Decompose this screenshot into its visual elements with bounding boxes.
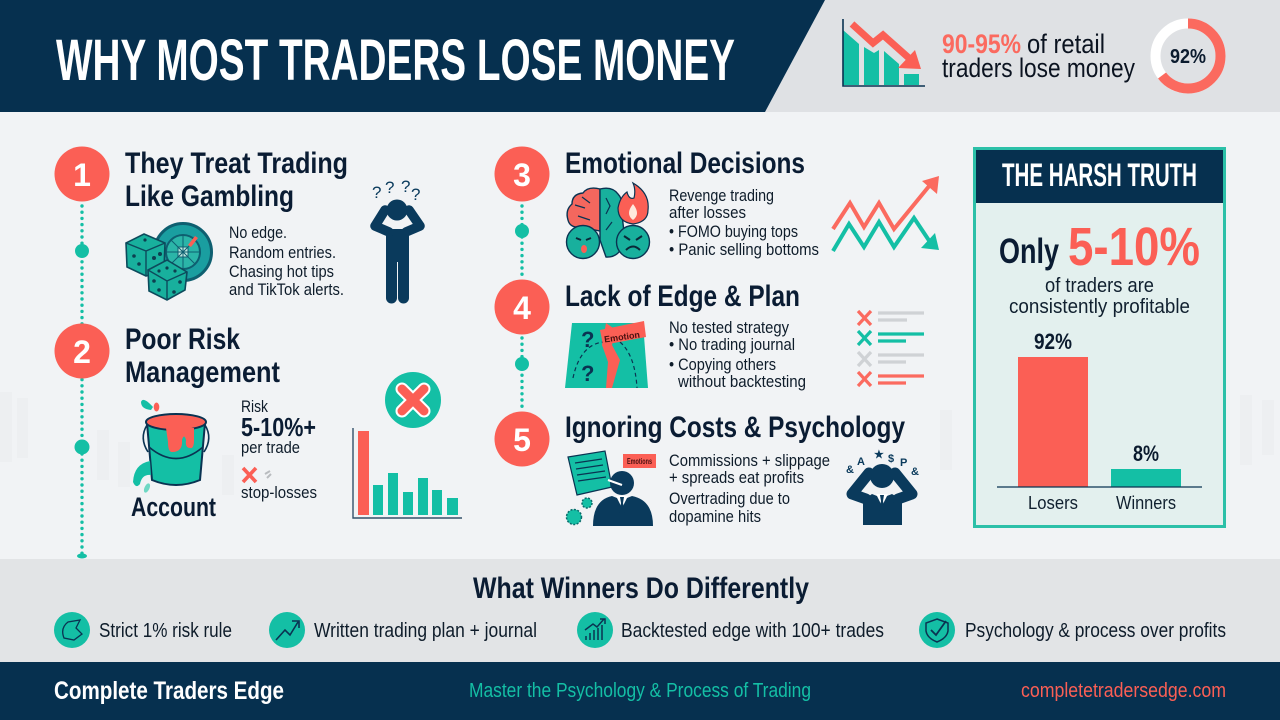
number badge 4: 4 xyxy=(513,290,531,326)
text: of traders are consistently profitable xyxy=(1009,274,1190,318)
icon: leaking paint bucket xyxy=(133,400,209,494)
panel: cause 2 risk xyxy=(54,323,462,522)
text: risk 5-10 percent per trade, no stop-losses: Risk xyxy=(241,398,269,416)
item: written trading plan: Written trading plan + journal xyxy=(314,620,537,642)
heading: emotional decisions: Emotional Decisions xyxy=(565,147,805,180)
label: account: Account xyxy=(131,492,216,522)
text: revenge trading, FOMO, panic selling: after losses xyxy=(669,204,746,222)
text: no tested strategy, journal, copying: • No trading journal xyxy=(669,336,795,354)
heading: poor risk management: Poor Risk xyxy=(125,323,240,356)
panel: what winners do differently xyxy=(0,559,1280,662)
timeline: left column xyxy=(74,206,90,558)
icon: confused person xyxy=(372,177,420,304)
number badge 3 xyxy=(494,146,550,202)
text: no tested strategy, journal, copying: • Copying others xyxy=(669,356,776,374)
icon: document, stressed trader and bubble xyxy=(566,451,656,526)
text: risk 5-10 percent per trade, no stop-losses: stop-losses xyxy=(241,484,317,502)
stat: 90-95 percent of retail traders lose money: traders lose money xyxy=(942,53,1135,83)
text: commissions and overtrading: Overtrading due to xyxy=(669,490,790,508)
icon: crossed checklist xyxy=(858,311,924,386)
header: navy title banner xyxy=(0,0,825,112)
text: revenge trading, FOMO, panic selling: • Panic selling bottoms xyxy=(669,241,819,259)
icon: overwhelmed trader with symbols: $ xyxy=(888,453,894,465)
icon: overwhelmed trader with symbols: & xyxy=(911,466,919,478)
number badge 1 xyxy=(54,146,110,202)
icon: brain, flame and angry faces xyxy=(566,183,650,258)
heading: they treat trading like gambling: They Treat Trading xyxy=(125,147,348,180)
headline stat: only 5-10 percent xyxy=(999,217,1200,277)
panel: cause 1 gambling xyxy=(54,146,420,304)
item: backtested edge: Backtested edge with 100+ trades xyxy=(621,620,884,642)
text: of traders are consistently profitable: of traders are xyxy=(1045,274,1154,297)
heading: they treat trading like gambling xyxy=(125,147,348,213)
bar chart: losers versus winners: 8% xyxy=(1133,441,1159,466)
text: no edge xyxy=(229,224,344,299)
number badge 4 xyxy=(494,280,550,334)
panel: the harsh truth xyxy=(974,148,1224,526)
item: backtested edge xyxy=(577,612,884,648)
text: revenge trading, FOMO, panic selling: Revenge trading xyxy=(669,187,774,205)
stat: 90-95 percent of retail traders lose money: of retail xyxy=(1027,29,1105,59)
icon: document, stressed trader and bubble: Emotions xyxy=(627,457,652,466)
text: no tested strategy, journal, copying xyxy=(669,319,806,391)
text: no edge: Chasing hot tips xyxy=(229,263,334,281)
text: no tested strategy, journal, copying: No tested strategy xyxy=(669,319,790,337)
icon: confused person: ? xyxy=(372,183,381,202)
icon: torn map with question marks: ? xyxy=(581,327,594,352)
text: revenge trading, FOMO, panic selling: • FOMO buying tops xyxy=(669,223,798,241)
text: risk 5-10 percent per trade, no stop-losses: 5-10%+ xyxy=(241,412,316,442)
text: risk 5-10 percent per trade, no stop-losses xyxy=(241,398,317,502)
timeline: middle column xyxy=(515,206,529,412)
item: strict risk rule xyxy=(54,612,232,648)
number badge 2: 2 xyxy=(73,334,91,370)
icon: confused person: ? xyxy=(401,177,410,196)
panel: cause 4 no plan xyxy=(494,280,924,391)
text: commissions and overtrading: dopamine hits xyxy=(669,508,761,526)
bar chart: losers versus winners: Winners xyxy=(1116,493,1176,513)
heading: they treat trading like gambling: Like Gambling xyxy=(125,180,294,213)
stat: 90-95 percent of retail traders lose money xyxy=(942,29,1135,83)
icon: overwhelmed trader with symbols: A xyxy=(857,456,865,468)
footer brand: Complete Traders Edge xyxy=(54,677,284,705)
text: no edge: and TikTok alerts. xyxy=(229,281,344,299)
donut chart: 92 percent: 92% xyxy=(1170,46,1206,68)
icon: overwhelmed trader with symbols: & xyxy=(846,464,854,476)
stat: 90-95 percent of retail traders lose money: 90-95% xyxy=(942,29,1021,59)
icon: confused person: ? xyxy=(385,178,394,197)
item: psychology and process: Psychology & process over profits xyxy=(965,620,1226,642)
text: of traders are consistently profitable: consistently profitable xyxy=(1009,295,1190,318)
item: strict risk rule: Strict 1% risk rule xyxy=(99,620,232,642)
text: commissions and overtrading: Commissions + slippage xyxy=(669,452,830,470)
footer website: completetradersedge.com xyxy=(1021,680,1226,702)
text: no edge: No edge. xyxy=(229,224,287,242)
item: psychology and process xyxy=(919,612,1226,648)
number badge 5 xyxy=(494,412,550,466)
bar chart: losers versus winners: Losers xyxy=(1028,493,1078,513)
text: commissions and overtrading xyxy=(669,452,830,526)
text: risk 5-10 percent per trade, no stop-losses: per trade xyxy=(241,439,300,457)
headline stat: only 5-10 percent: Only xyxy=(999,232,1059,271)
headline stat: only 5-10 percent: 5-10% xyxy=(1068,217,1200,277)
panel header xyxy=(976,150,1223,203)
number badge 2 xyxy=(54,324,110,378)
footer xyxy=(0,662,1280,720)
item: written trading plan xyxy=(269,612,537,648)
donut chart: 92 percent xyxy=(1156,24,1220,88)
icon: zigzag up and down arrows xyxy=(833,176,939,251)
icon: overwhelmed trader with symbols: P xyxy=(900,457,907,469)
icon: overwhelmed trader with symbols xyxy=(846,449,919,525)
text: no edge: Random entries. xyxy=(229,244,336,262)
heading: what winners do differently: What Winners Do Differently xyxy=(473,572,809,605)
icon: overwhelmed trader with symbols: ★ xyxy=(874,449,884,461)
bar chart: losers versus winners: 92% xyxy=(1034,329,1072,354)
icon: red cross in teal circle xyxy=(385,372,441,428)
icon: torn map with question marks: ? xyxy=(581,361,594,386)
icon: confused person: ? xyxy=(411,185,420,204)
heading: ignoring costs and psychology: Ignoring Costs & Psychology xyxy=(565,411,905,444)
number badge 5: 5 xyxy=(513,422,531,458)
number badge 1: 1 xyxy=(73,157,91,193)
heading: poor risk management xyxy=(125,323,280,389)
text: revenge trading, FOMO, panic selling xyxy=(669,187,819,259)
footer tagline: Master the Psychology & Process of Trading xyxy=(469,680,811,702)
heading: lack of edge and plan: Lack of Edge & Plan xyxy=(565,280,800,313)
icon: torn map with question marks xyxy=(565,321,648,388)
header: top right stat band xyxy=(0,0,1280,112)
icon: falling bar chart xyxy=(843,19,925,86)
bar chart: losers versus winners xyxy=(997,329,1202,513)
title: WHY MOST TRADERS LOSE MONEY xyxy=(56,28,735,93)
icon: torn map with question marks: Emotion xyxy=(603,330,641,344)
panel: cause 5 costs xyxy=(494,411,919,526)
heading: poor risk management: Management xyxy=(125,356,280,389)
bar chart: oversized loss xyxy=(353,428,462,518)
text: no tested strategy, journal, copying: without backtesting xyxy=(677,373,806,391)
icon: dice and roulette wheel xyxy=(126,224,212,300)
number badge 3: 3 xyxy=(513,157,531,193)
panel: cause 3 emotions xyxy=(494,146,939,259)
text: commissions and overtrading: + spreads eat profits xyxy=(669,469,804,487)
